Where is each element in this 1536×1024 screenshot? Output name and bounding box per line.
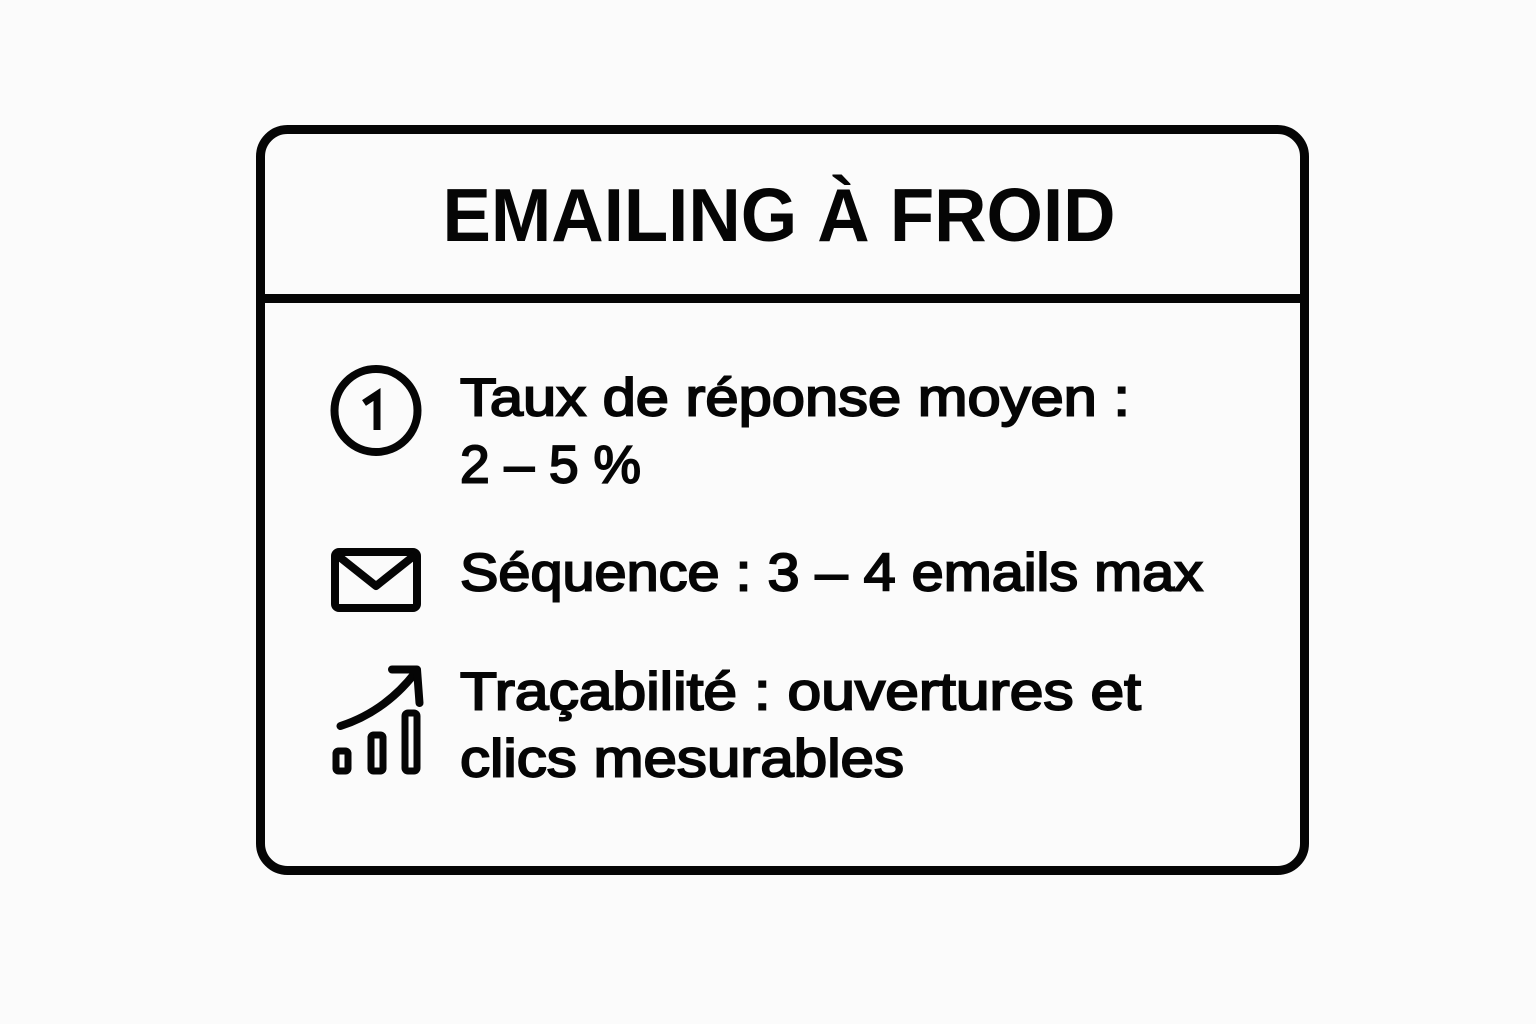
text: response rate: Taux de réponse moyen : xyxy=(460,368,1130,428)
text: traceability: clics mesurables xyxy=(460,730,904,788)
text: response rate: 2 – 5 % xyxy=(460,436,641,494)
text: sequence: Séquence : 3 – 4 emails max xyxy=(460,544,1203,602)
icon: envelope xyxy=(335,552,417,608)
text: traceability xyxy=(460,662,1141,788)
text: response rate xyxy=(460,368,1130,494)
title: EMAILING À FROID xyxy=(442,173,1116,257)
icon: growth chart with arrow xyxy=(336,670,420,771)
text: traceability: Traçabilité : ouvertures et xyxy=(460,662,1141,722)
panel: emailing card xyxy=(260,130,1305,870)
icon: numbered circle xyxy=(334,369,418,452)
